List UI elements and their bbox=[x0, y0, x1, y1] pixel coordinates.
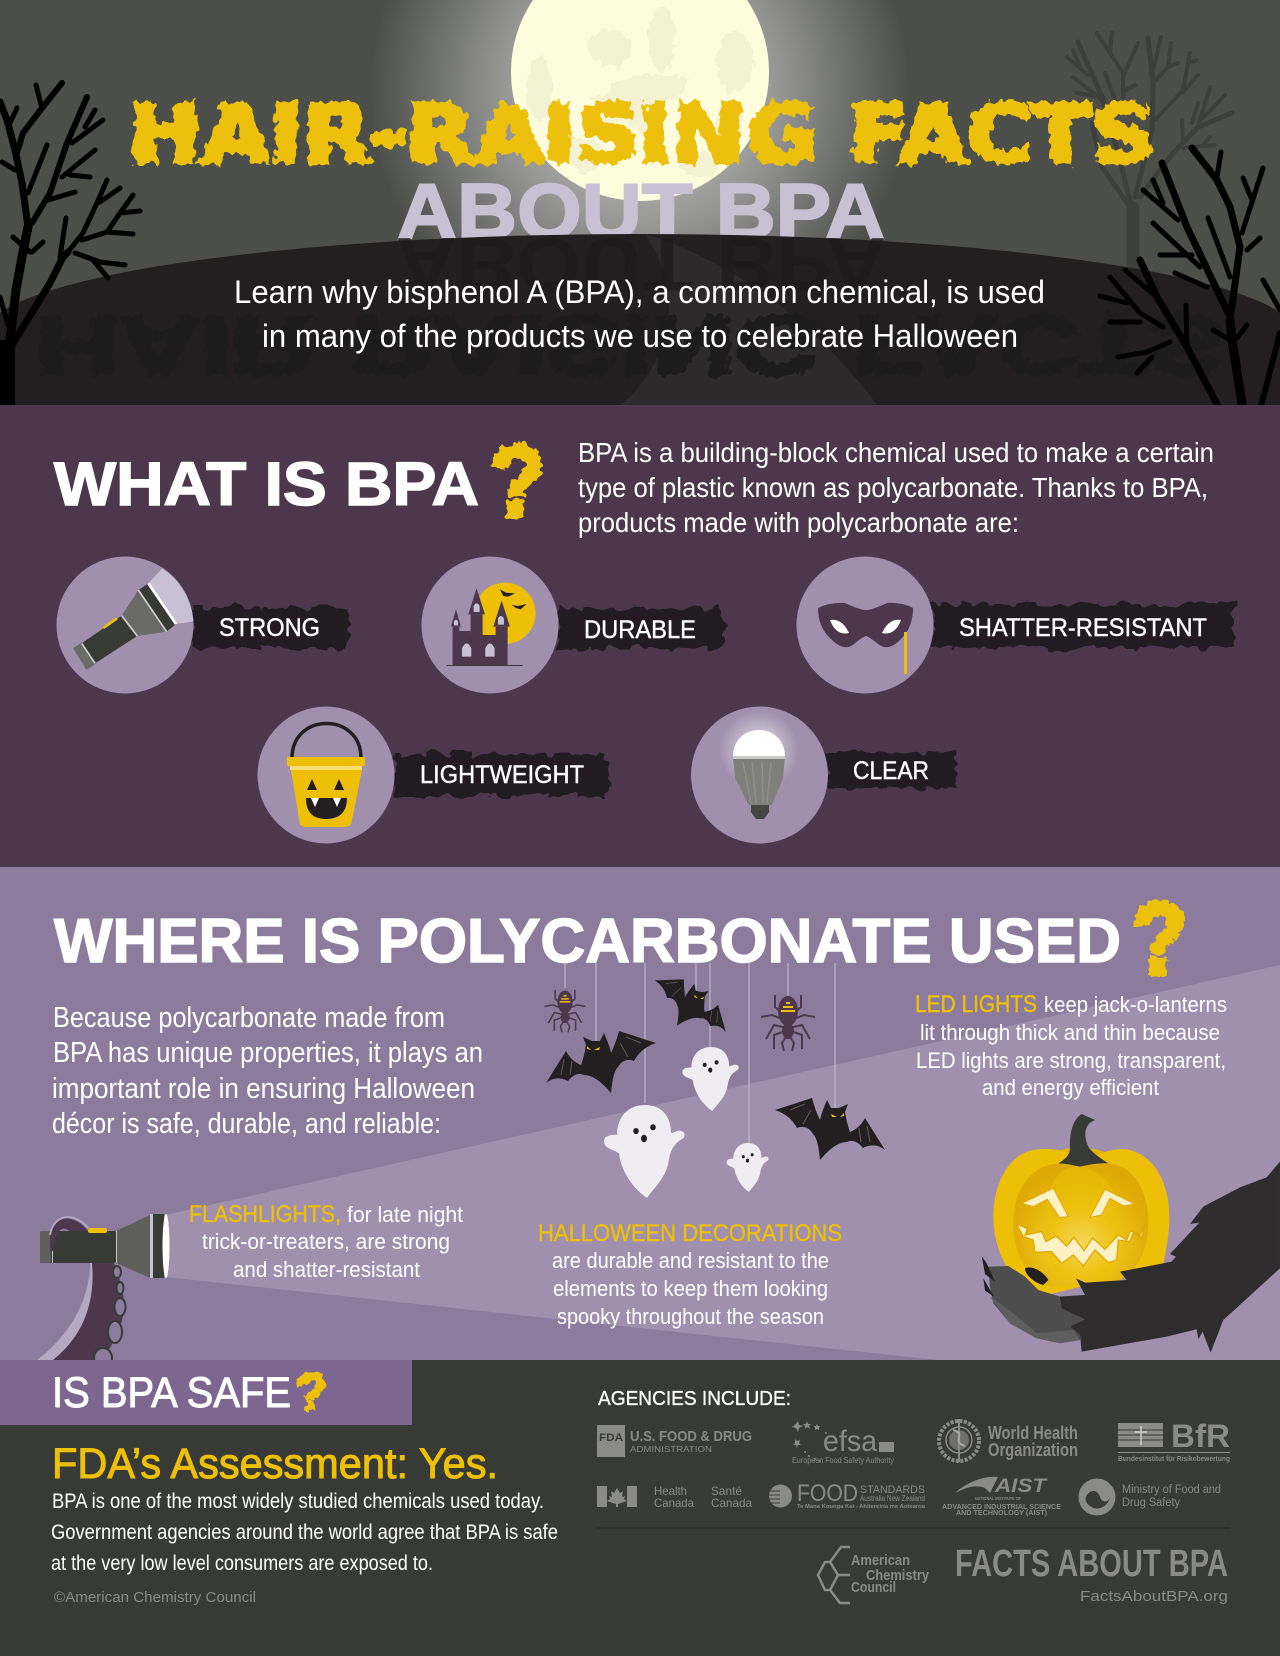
heading: what is bpa: WHAT IS BPA bbox=[54, 450, 479, 518]
logo: aist: AIST bbox=[994, 1476, 1048, 1497]
text: halloween decorations: elements to keep them looking bbox=[553, 1276, 828, 1301]
panel: what is bpa bbox=[0, 405, 1280, 867]
icon: bat right bbox=[775, 1098, 885, 1160]
reflection: title: HAIR-RAISING FACTS bbox=[37, 299, 1224, 390]
property: clear bbox=[691, 706, 956, 844]
hanging threads bbox=[565, 963, 835, 1143]
property: shatter-resistant bbox=[796, 556, 1233, 694]
banner: is bpa safe: ? bbox=[296, 1364, 326, 1422]
text: intro: Because polycarbonate made from bbox=[53, 1002, 445, 1034]
logo: health canada: Canada bbox=[711, 1496, 752, 1510]
logo: health canada bbox=[597, 1484, 752, 1510]
text: definition bbox=[578, 437, 1214, 538]
text: flashlights: trick-or-treaters, are strong bbox=[202, 1229, 450, 1254]
logo: food standards: Te Mana Kounga Kai - Ahitereiria me Aotearoa bbox=[797, 1504, 925, 1510]
text: led lights: lit through thick and thin because bbox=[920, 1020, 1220, 1045]
logo: efsa: efsa bbox=[823, 1425, 877, 1458]
text: halloween decorations: spooky throughout the season bbox=[557, 1304, 824, 1329]
logo: aist: ADVANCED INDUSTRIAL SCIENCE bbox=[942, 1502, 1061, 1511]
icon: bat top bbox=[655, 979, 726, 1032]
banner: is bpa safe: IS BPA SAFE bbox=[52, 1369, 291, 1417]
heading: where is polycarbonate used: WHERE IS POLYCARBONATE USED bbox=[54, 907, 1121, 976]
logo: facts about bpa: FactsAboutBPA.org bbox=[1080, 1588, 1228, 1605]
logo: aist: NATIONAL INSTITUTE OF bbox=[975, 1496, 1021, 1501]
property: shatter-resistant: SHATTER-RESISTANT bbox=[959, 614, 1207, 642]
property: durable bbox=[422, 556, 724, 694]
logo: fda: U.S. FOOD & DRUG bbox=[630, 1428, 752, 1445]
logo: aist bbox=[942, 1476, 1061, 1517]
text: intro bbox=[52, 1002, 483, 1140]
icon: question mark: ? bbox=[1132, 881, 1187, 995]
logo: bfr: Bundesinstitut für Risikobewertung bbox=[1118, 1454, 1230, 1463]
text: safety statement: BPA is one of the most widely studied chemicals used today. bbox=[52, 1490, 544, 1513]
text: led lights: LED lights are strong, transparent, bbox=[916, 1048, 1226, 1073]
heading: fda assessment: FDA’s Assessment: Yes. bbox=[52, 1440, 498, 1488]
text: intro: décor is safe, durable, and reliable: bbox=[52, 1108, 441, 1140]
hill bbox=[0, 234, 1280, 405]
flashlight beam bbox=[165, 965, 1280, 1360]
logo: food standards: STANDARDS bbox=[860, 1484, 925, 1496]
property: lightweight: LIGHTWEIGHT bbox=[420, 761, 584, 789]
icon: bat left bbox=[546, 1031, 656, 1093]
logo: food standards bbox=[769, 1480, 925, 1510]
property: strong: STRONG bbox=[219, 614, 320, 642]
text: intro: important role in ensuring Halloween bbox=[52, 1073, 475, 1105]
text: copyright: ©American Chemistry Council bbox=[54, 1589, 256, 1606]
icon: spider right bbox=[761, 995, 815, 1051]
property: strong bbox=[56, 556, 348, 694]
logo: facts about bpa bbox=[955, 1543, 1228, 1605]
logo: aist: AND TECHNOLOGY (AIST) bbox=[956, 1510, 1047, 1517]
icon: werewolf hand holding pumpkin bbox=[982, 1114, 1280, 1353]
subtitle bbox=[234, 274, 1045, 354]
logo: bfr: BfR bbox=[1171, 1418, 1230, 1454]
logo: world health organization: World Health bbox=[988, 1423, 1078, 1443]
property: durable: DURABLE bbox=[584, 616, 696, 644]
logo: american chemistry council bbox=[818, 1547, 930, 1603]
logo: world health organization bbox=[939, 1419, 1078, 1462]
text: flashlights bbox=[190, 1205, 463, 1277]
road bbox=[620, 234, 877, 405]
subtitle: Learn why bisphenol A (BPA), a common chemical, is used bbox=[234, 274, 1045, 310]
text: safety statement: at the very low level consumers are exposed to. bbox=[51, 1552, 433, 1575]
text: led lights bbox=[915, 991, 1227, 1100]
text: safety statement: Government agencies around the world agree that BPA is safe bbox=[51, 1521, 558, 1544]
logo: american chemistry council: Chemistry bbox=[866, 1567, 930, 1584]
logo: world health organization: Organization bbox=[988, 1440, 1078, 1460]
text: led lights: and energy efficient bbox=[982, 1075, 1159, 1100]
text: halloween decorations bbox=[538, 1220, 842, 1329]
logo: american chemistry council: American bbox=[851, 1552, 910, 1569]
text: intro: BPA has unique properties, it plays an bbox=[53, 1037, 483, 1069]
text: definition: type of plastic known as polycarbonate. Thanks to BPA, bbox=[578, 472, 1208, 503]
property: clear: CLEAR bbox=[853, 757, 929, 785]
property: lightweight bbox=[258, 706, 608, 844]
logo: american chemistry council: Council bbox=[851, 1579, 896, 1596]
title: HAIR-RAISING FACTS bbox=[128, 88, 1155, 181]
logo: health canada: Health bbox=[654, 1484, 687, 1498]
text: halloween decorations: are durable and resistant to the bbox=[552, 1248, 829, 1273]
heading: agencies include: AGENCIES INCLUDE: bbox=[598, 1388, 791, 1410]
logo: health canada: Santé bbox=[711, 1484, 742, 1498]
text: halloween decorations: HALLOWEEN DECORATIONS bbox=[538, 1220, 842, 1247]
text: safety statement bbox=[51, 1490, 558, 1575]
logo: efsa: European Food Safety Authority bbox=[792, 1455, 895, 1465]
logo: ministry of food and drug safety bbox=[1078, 1478, 1221, 1516]
icon: right black tree bbox=[1100, 148, 1280, 410]
panel: is bpa safe footer bbox=[0, 1360, 1280, 1656]
text: flashlights: and shatter-resistant bbox=[233, 1257, 420, 1282]
logo: food standards: FOOD bbox=[797, 1480, 858, 1507]
icon: spider left bbox=[544, 990, 586, 1032]
logo: bfr bbox=[1118, 1418, 1230, 1463]
logo: health canada: Canada bbox=[654, 1496, 694, 1510]
text: led lights: keep jack-o-lanterns bbox=[1044, 992, 1227, 1017]
logo: fda: ADMINISTRATION bbox=[630, 1445, 712, 1454]
logo: ministry of food and drug safety: Drug Safety bbox=[1122, 1497, 1180, 1509]
text: led lights: LED LIGHTS bbox=[915, 991, 1037, 1018]
icon: question mark: ? bbox=[490, 425, 545, 537]
text: definition: BPA is a building-block chemical used to make a certain bbox=[578, 437, 1214, 468]
banner: is bpa safe bbox=[0, 1360, 412, 1425]
icon: small ghost bbox=[727, 1143, 769, 1192]
heading: about bpa: ABOUT BPA bbox=[397, 167, 885, 255]
logo: fda bbox=[597, 1425, 752, 1457]
reflection: about bpa: ABOUT BPA bbox=[396, 221, 886, 306]
icon: left black tree bbox=[0, 83, 140, 405]
logo: ministry of food and drug safety: Ministry of Food and bbox=[1122, 1484, 1221, 1496]
icon: medium ghost bbox=[682, 1047, 739, 1111]
text: flashlights: for late night bbox=[347, 1202, 463, 1227]
icon: big ghost bbox=[604, 1105, 685, 1198]
logo: efsa bbox=[792, 1421, 895, 1465]
subtitle: in many of the products we use to celebrate Halloween bbox=[262, 318, 1018, 354]
icon: octopus holding flashlight bbox=[37, 1214, 170, 1368]
logo: fda: FDA bbox=[599, 1432, 623, 1444]
panel: where is polycarbonate used bbox=[0, 867, 1280, 1368]
text: definition: products made with polycarbonate are: bbox=[578, 507, 1019, 538]
logo: food standards: Australia New Zealand bbox=[860, 1494, 925, 1503]
icon: full moon bbox=[511, 0, 769, 201]
text: flashlights: FLASHLIGHTS, bbox=[189, 1201, 341, 1228]
icon: distant grey tree bbox=[1065, 31, 1234, 269]
panel: header night scene bbox=[0, 0, 1280, 410]
